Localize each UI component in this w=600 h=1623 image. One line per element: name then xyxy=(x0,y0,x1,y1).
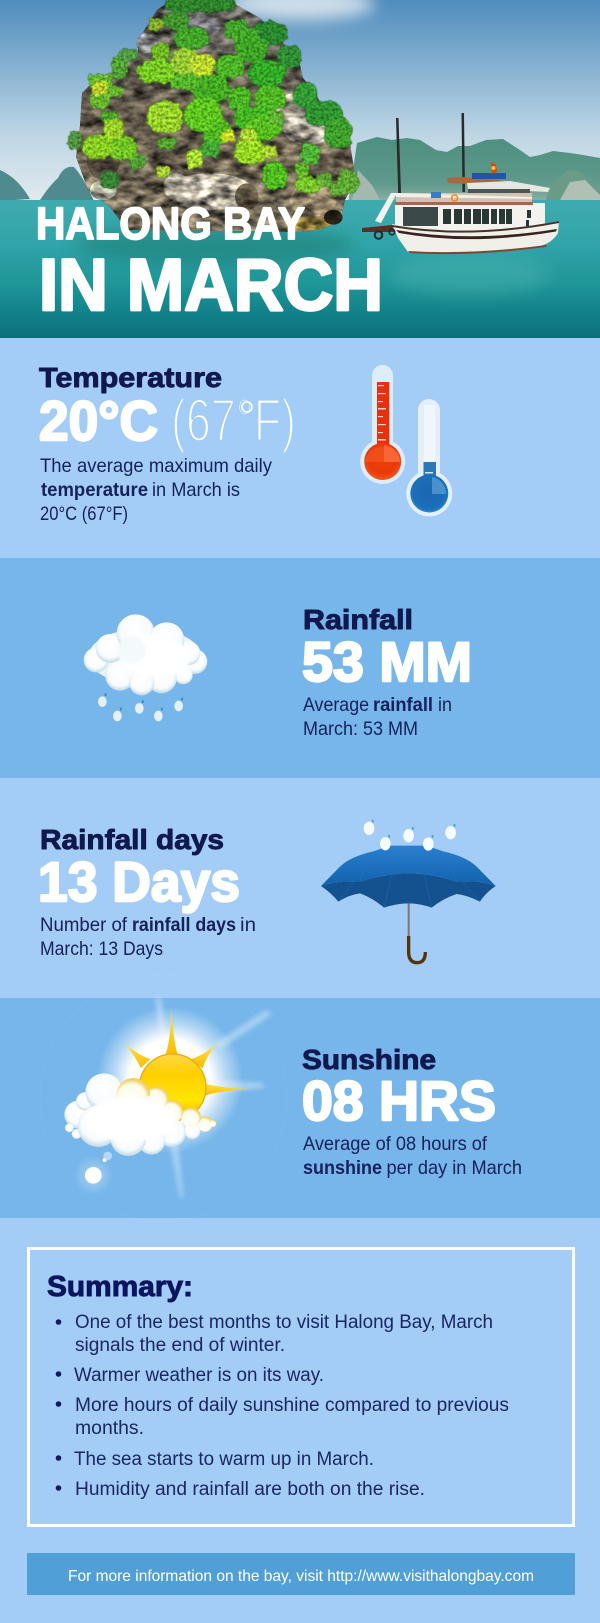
heading: rainfall: Rainfall xyxy=(303,604,413,635)
title: Halong Bay: HALONG BAY xyxy=(36,198,305,249)
description: rainfall days: Number of xyxy=(40,914,128,936)
umbrella shaft and handle xyxy=(409,873,425,963)
sky xyxy=(0,0,600,205)
umbrella ribs xyxy=(338,851,480,908)
value: 13 Days: 13 Days xyxy=(38,850,240,913)
description: rainfall xyxy=(303,694,452,740)
cloud xyxy=(225,0,375,20)
description: rainfall: March: 53 MM xyxy=(303,718,418,740)
light streaks xyxy=(155,998,272,1198)
distant islets xyxy=(0,167,94,201)
value: 08 HRS: 08 HRS xyxy=(302,1069,496,1132)
mountain range xyxy=(348,137,600,203)
description: rainfall: rainfall xyxy=(373,694,433,716)
sun disc xyxy=(139,1054,206,1121)
raindrops on umbrella xyxy=(364,820,456,851)
description: sunshine: per day in March xyxy=(386,1157,522,1179)
cloud highlight xyxy=(85,1098,175,1141)
boat reflection xyxy=(390,255,550,295)
summary bullet list: More hours of daily sunshine compared to previous xyxy=(75,1395,509,1416)
description: temperature xyxy=(40,455,272,525)
icon: umbrella xyxy=(321,820,496,963)
panel: temperature xyxy=(0,338,600,558)
panel: sunshine xyxy=(0,975,600,1221)
description: rainfall days: March: 13 Days xyxy=(40,938,163,960)
icon: red thermometer xyxy=(360,365,405,484)
raindrops xyxy=(98,693,183,721)
lens dots xyxy=(73,1152,113,1195)
panel: rainfall xyxy=(0,558,600,778)
limestone karst rock xyxy=(70,0,357,232)
heading: summary: Summary: xyxy=(47,1271,193,1303)
summary bullet list: Humidity and rainfall are both on the rise. xyxy=(75,1479,425,1500)
description: rainfall: in xyxy=(438,694,452,716)
summary bullet list: The sea starts to warm up in March. xyxy=(74,1449,374,1470)
description: rainfall days xyxy=(40,914,256,960)
panel: summary xyxy=(28,1248,574,1526)
value: 20°C: 20°C xyxy=(39,389,158,452)
description: sunshine: sunshine xyxy=(303,1157,382,1179)
sun rays xyxy=(124,1010,252,1095)
hero photo: Halong Bay xyxy=(0,0,600,338)
description: rainfall days: in xyxy=(240,914,256,936)
icon: blue thermometer xyxy=(406,399,452,516)
icon: thermometers xyxy=(360,365,452,516)
description: rainfall: Average xyxy=(303,694,369,716)
description: temperature: temperature xyxy=(41,479,148,501)
heading: rainfall days: Rainfall days xyxy=(40,824,224,855)
cloud puffs xyxy=(84,614,207,695)
description: rainfall days: rainfall days xyxy=(132,914,236,936)
footer link text: For more information on the bay, visit http://www.visithalongbay.com xyxy=(68,1568,534,1585)
heading: temperature: Temperature xyxy=(39,362,222,393)
description: temperature: The average maximum daily xyxy=(40,455,272,477)
description: temperature: 20°C (67°F) xyxy=(40,503,128,525)
value: 67°F: (67°F) xyxy=(171,387,296,454)
value: 53 MM: 53 MM xyxy=(302,630,472,693)
sea xyxy=(0,200,600,338)
heading: sunshine: Sunshine xyxy=(302,1044,436,1075)
icon: rain cloud xyxy=(84,614,207,721)
footer bar xyxy=(27,1553,575,1595)
faint ring xyxy=(40,975,287,1221)
foliage xyxy=(70,0,357,193)
rock reflection xyxy=(75,225,355,265)
umbrella underside xyxy=(321,873,496,908)
summary bullet list: months. xyxy=(75,1418,144,1439)
title: In March: IN MARCH xyxy=(39,245,383,326)
sun glow xyxy=(97,1006,243,1153)
description: sunshine: Average of 08 hours of xyxy=(303,1133,488,1155)
summary bullet list: signals the end of winter. xyxy=(75,1335,285,1356)
summary bullet list: Warmer weather is on its way. xyxy=(74,1365,324,1386)
summary bullet list xyxy=(56,1312,509,1500)
cruise boat xyxy=(362,113,559,254)
panel: rainfall days xyxy=(0,778,600,998)
summary bullet list: One of the best months to visit Halong Bay, March xyxy=(75,1312,493,1333)
back cloud puffs xyxy=(64,1073,216,1156)
description: temperature: in March is xyxy=(152,479,240,501)
description: sunshine xyxy=(303,1133,522,1179)
icon: sun behind cloud xyxy=(40,975,287,1221)
umbrella canopy xyxy=(321,846,496,886)
